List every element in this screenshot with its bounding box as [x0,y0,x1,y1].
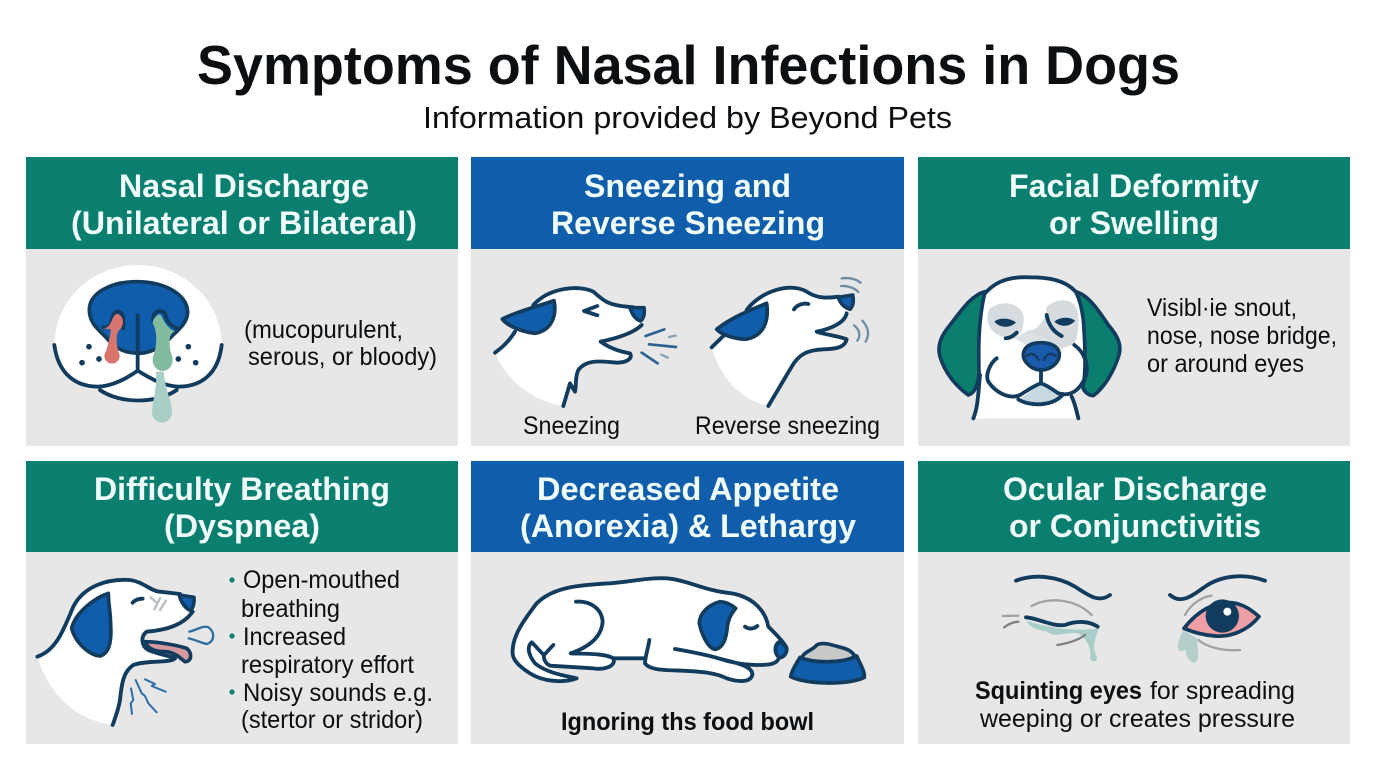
heading: nasal discharge: (Unilateral or Bilateral) [71,205,417,241]
heading: ocular discharge: Ocular Discharge [1003,471,1267,507]
text: squinting eyes [975,677,1295,733]
panel: facial deformity [918,157,1350,446]
bullet list: breathing signs: Open-mouthed [243,566,400,594]
panel: decreased appetite [471,461,904,744]
icon: red weeping eye [1170,576,1265,663]
text: discharge types: serous, or bloody) [248,343,437,371]
heading: sneezing: Sneezing and [584,168,791,204]
heading: facial deformity: or Swelling [1049,205,1219,241]
text: squinting eyes: weeping or creates pressure [979,705,1295,733]
text: facial swelling location: Visibl·ie snout, [1147,294,1297,322]
heading: facial deformity: Facial Deformity [1009,168,1259,204]
text: squinting eyes: Squinting eyes [975,677,1142,705]
title: Symptoms of Nasal Infections in Dogs [197,34,1180,96]
text: discharge types: (mucopurulent, [244,316,403,344]
bullet list: breathing signs: breathing [241,595,340,623]
bullet list: breathing signs: Noisy sounds e.g. [243,679,433,707]
icon: dog face swollen [939,277,1120,418]
caption: sneezing: Sneezing [523,412,620,440]
bullet list: breathing signs: Increased [243,623,346,651]
icon: dog nose with discharge [54,265,222,423]
text: facial swelling location: or around eyes [1147,350,1304,378]
heading: ocular discharge [1003,471,1267,544]
bullet list: breathing signs: respiratory effort [241,651,414,679]
heading: difficulty breathing: (Dyspnea) [164,508,320,544]
caption: ignoring food bowl: Ignoring ths food bowl [561,708,814,736]
heading: sneezing [551,168,825,241]
bullet list: breathing signs [229,566,433,734]
icon: dog panting [37,580,213,725]
panel: difficulty breathing [26,461,458,744]
panel: nasal discharge [26,157,458,446]
text: facial swelling location: nose, nose bridge, [1147,322,1337,350]
heading: difficulty breathing: Difficulty Breathing [94,471,390,507]
heading: difficulty breathing [94,471,390,544]
icon: lethargic dog lying down [513,578,864,683]
panel: sneezing [471,157,904,446]
heading: ocular discharge: or Conjunctivitis [1009,508,1261,544]
text: discharge types [244,316,437,371]
caption: reverse sneezing: Reverse sneezing [695,412,880,440]
heading: nasal discharge: Nasal Discharge [119,168,369,204]
heading: decreased appetite: Decreased Appetite [537,471,839,507]
heading: nasal discharge [71,168,417,241]
icon: squinting eye [1003,577,1110,661]
text: squinting eyes: for spreading [1150,677,1295,705]
subtitle: Information provided by Beyond Pets [423,100,952,135]
text: facial swelling location [1147,294,1337,378]
panel: ocular discharge [918,461,1350,744]
icon: dog sneezing [495,288,676,406]
icon: dog reverse sneezing [712,278,868,406]
bullet list: breathing signs: (stertor or stridor) [241,706,423,734]
heading: decreased appetite: (Anorexia) & Lethargy [520,508,856,544]
heading: facial deformity [1009,168,1259,241]
heading: sneezing: Reverse Sneezing [551,205,825,241]
heading: decreased appetite [520,471,856,544]
